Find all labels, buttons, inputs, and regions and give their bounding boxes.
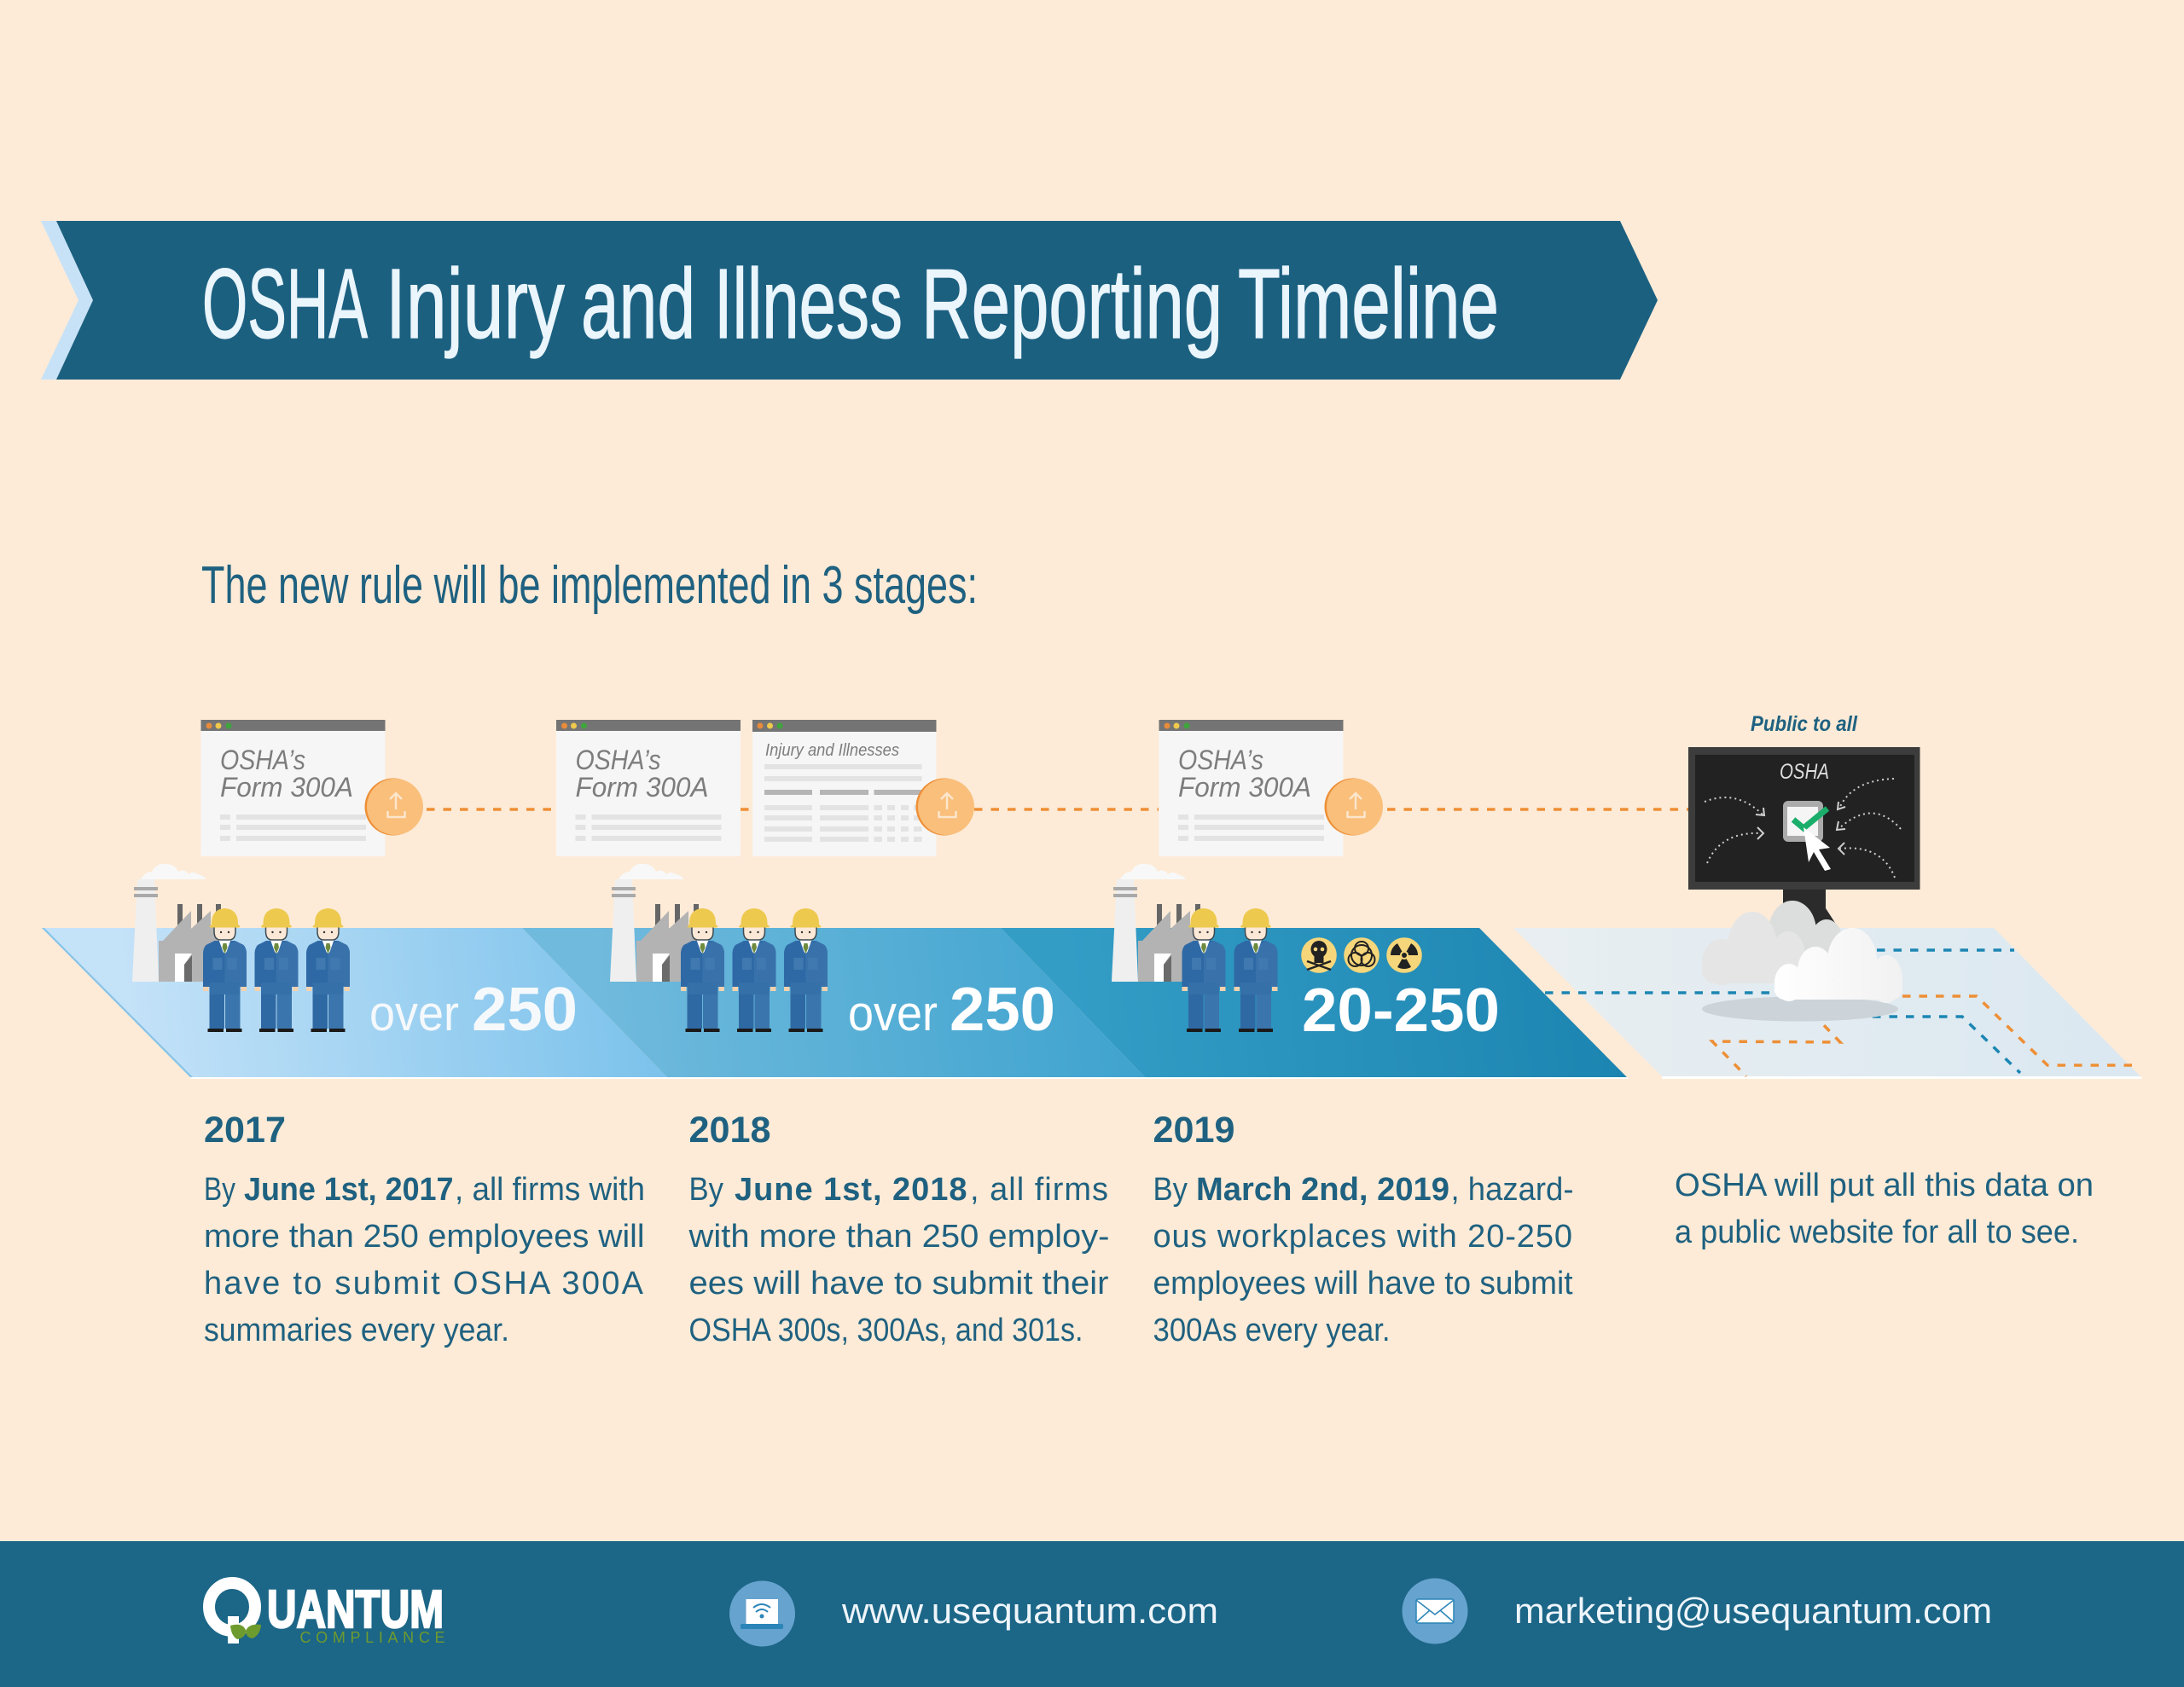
column: public data note: [1675, 1168, 2094, 1250]
column: 2019: ous workplaces with 20-250: [1153, 1219, 1572, 1255]
column: 2018: ees will have to submit their: [689, 1266, 1109, 1301]
column: 2017: [204, 1110, 645, 1348]
stage 2 form card: injury and illnesses: Injury and Illnesses: [765, 741, 899, 760]
column: public data note: a public website for all to see.: [1675, 1215, 2079, 1250]
stage 3 form card: [1159, 720, 1343, 856]
cursor: [1804, 827, 1831, 871]
logo: Quantum Compliance: [209, 1580, 445, 1646]
cloud: left: [1702, 912, 1805, 985]
column: 2018: By: [689, 1172, 723, 1208]
network dashed lines on panel: [1545, 950, 2132, 1076]
data panel: public website platform: [1513, 928, 2142, 1079]
stage 3 form card: OSHA’s: [1178, 745, 1263, 775]
column: 2017: 2017: [204, 1110, 286, 1151]
stage 2 form card: 300A: [556, 720, 741, 856]
column: 2019: employees will have to submit: [1153, 1266, 1573, 1301]
dashed connector: forms to monitor: [427, 808, 1688, 811]
icon: biohazard: [1344, 937, 1380, 973]
monitor: [1688, 747, 1920, 925]
stage 1 employee label: [369, 976, 578, 1044]
stage 1 form card: [201, 720, 386, 856]
stage 3 workers: [1182, 908, 1278, 1032]
title banner: [41, 221, 1658, 380]
title banner: Timeline: [1238, 248, 1499, 359]
cloud: front: [1774, 928, 1902, 1003]
stage 1 form card: OSHA’s: [220, 745, 305, 775]
stage 3 factory: [1112, 864, 1203, 982]
column: 2018: with more than 250 employ-: [688, 1219, 1109, 1255]
column: 2017: June 1st, 2017: [244, 1172, 454, 1208]
stage 2 form card: 300A: OSHA’s: [575, 745, 660, 775]
title banner: Illness: [714, 248, 903, 359]
column: 2019: March 2nd, 2019: [1196, 1172, 1449, 1208]
stage 3 employee label: 20-250: [1302, 977, 1500, 1045]
column: 2019: 2019: [1153, 1110, 1235, 1151]
title banner: and: [581, 248, 695, 359]
stage 1 employee label: over: [369, 986, 459, 1041]
icon: skull and crossbones: [1301, 937, 1337, 973]
hazard icons: [1301, 937, 1422, 973]
column: 2019: [1153, 1110, 1573, 1348]
stage 2 employee label: 250: [950, 976, 1055, 1044]
stage 3 form card: Form 300A: [1178, 772, 1311, 803]
stage 2 form card: injury and illnesses: [752, 720, 937, 856]
stage 1 upload button: [365, 778, 423, 836]
column: 2019: 300As every year.: [1153, 1313, 1391, 1348]
column: 2018: 2018: [689, 1110, 771, 1151]
title banner: Injury: [386, 248, 565, 359]
icon: envelope: [1403, 1578, 1467, 1644]
timeline ribbon: [42, 928, 1629, 1079]
title banner: Reporting: [921, 248, 1223, 359]
stage 1 workers: [203, 908, 350, 1032]
stage 1 factory: [132, 864, 224, 982]
caption: public to all: Public to all: [1751, 712, 1858, 736]
stage 3 upload button: [1324, 778, 1383, 836]
subtitle: The new rule will be implemented in 3 stages:: [201, 556, 978, 615]
website address: www.usequantum.com: [841, 1591, 1218, 1631]
stage 1 form card: Form 300A: [220, 772, 353, 803]
stage 1 employee label: 250: [472, 976, 578, 1044]
stage 2 form card: 300A: Form 300A: [575, 772, 708, 803]
column: 2018: June 1st, 2018: [735, 1172, 967, 1208]
column: 2018: [688, 1110, 1109, 1348]
column: 2018: , all firms: [970, 1172, 1108, 1208]
title banner: OSHA: [202, 248, 368, 359]
column: 2017: By: [204, 1172, 235, 1208]
column: 2017: summaries every year.: [204, 1313, 509, 1348]
monitor stand: [1783, 890, 1837, 925]
screen title: OSHA: [1780, 760, 1829, 784]
stage 2 workers: [681, 908, 828, 1032]
dotted arrows: [1705, 779, 1901, 878]
column: 2018: OSHA 300s, 300As, and 301s.: [689, 1313, 1083, 1348]
checkbox: [1783, 801, 1823, 842]
column: 2017: have to submit OSHA 300A: [204, 1266, 644, 1301]
cloud shadow: [1702, 996, 1898, 1022]
column: 2019: , hazard-: [1450, 1172, 1573, 1208]
email address: marketing@usequantum.com: [1514, 1591, 1992, 1631]
stage 2 employee label: [848, 976, 1055, 1044]
column: public data note: OSHA will put all this data on: [1675, 1168, 2094, 1203]
cloud: back: [1769, 901, 1844, 972]
stage 2 employee label: over: [848, 986, 938, 1041]
column: 2017: more than 250 employees will: [204, 1219, 645, 1255]
icon: wifi laptop: [729, 1581, 795, 1646]
stage 2 upload button: [916, 778, 974, 836]
stage 2 factory: [610, 864, 701, 982]
footer bar: [0, 1541, 2184, 1687]
logo: Quantum Compliance: COMPLIANCE: [300, 1629, 445, 1646]
logo: Quantum Compliance: UANTUM: [267, 1580, 444, 1639]
icon: radiation: [1386, 937, 1422, 973]
column: 2017: , all firms with: [455, 1172, 645, 1208]
column: 2019: By: [1153, 1172, 1188, 1208]
